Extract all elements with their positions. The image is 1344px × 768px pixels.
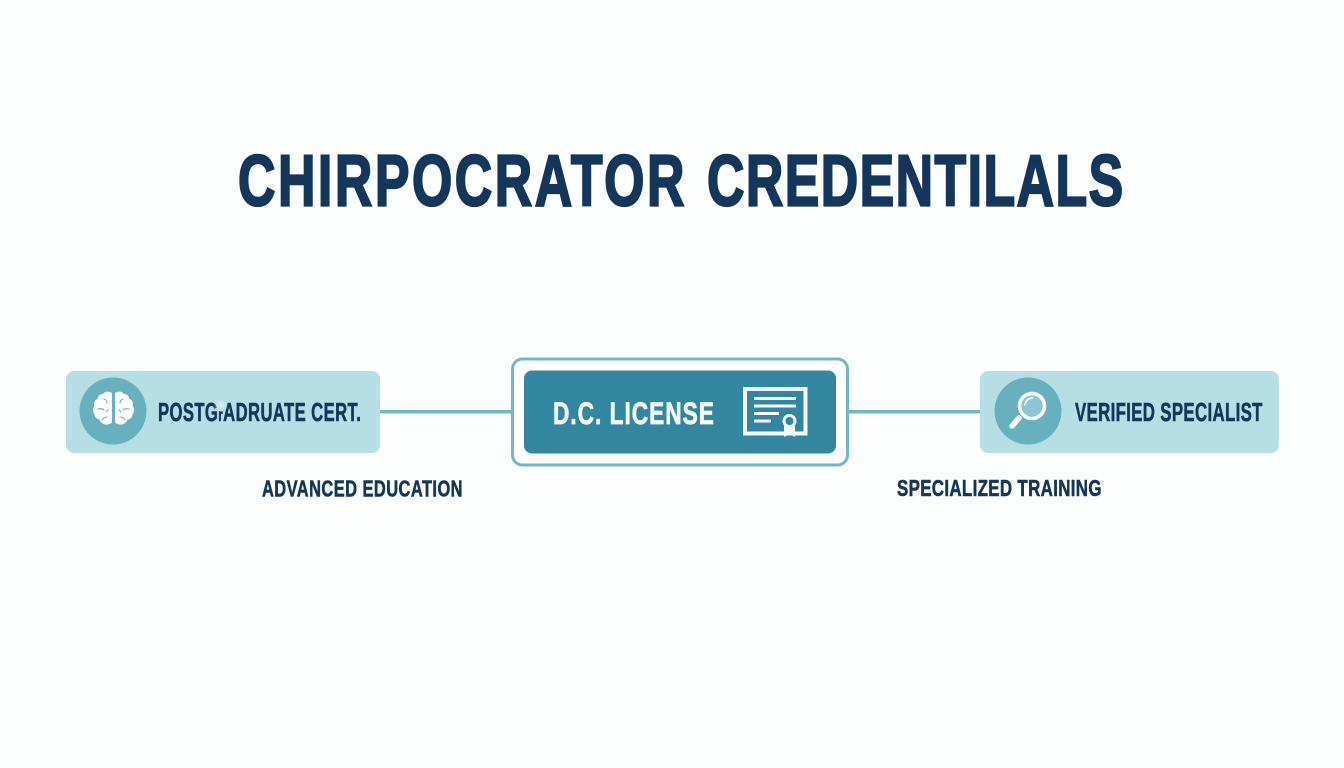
caption: specialized training: SPECIALIZED TRAINING (897, 475, 1101, 502)
label: D.C. license: D.C. LICENSE (553, 395, 714, 431)
label: verified specialist: VERIFIED SPECIALIST (1075, 397, 1262, 427)
connector: left panel to center (380, 410, 512, 414)
panel: postgraduate certificate (66, 371, 380, 453)
title: CHIRPOCRATOR (238, 141, 684, 222)
title: CREDENTILALS (707, 141, 1123, 222)
panel: verified specialist (980, 371, 1279, 453)
icon: certificate (745, 389, 806, 437)
caption: advanced education: ADVANCED EDUCATION (262, 477, 463, 502)
icon: brain (80, 378, 146, 444)
connector: center to right panel (848, 410, 981, 414)
title (238, 141, 1123, 222)
icon: magnifying glass (994, 378, 1062, 444)
label: postgraduate cert: POSTGrADRUATE CERT. (158, 397, 361, 427)
panel: D.C. license (512, 359, 848, 465)
